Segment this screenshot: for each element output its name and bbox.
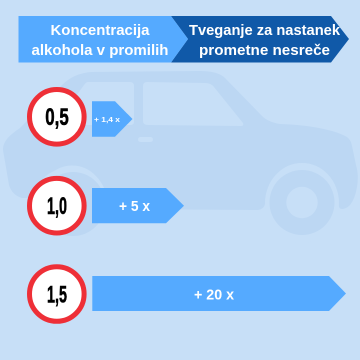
header arrow: alcohol concentration: alkohola v promilih <box>32 43 168 59</box>
bar +20 x: + 20 x <box>194 286 235 303</box>
sign 1,0: 1,0 <box>47 193 67 220</box>
door handle <box>138 137 153 142</box>
header arrow: risk of a traffic accident: Tveganje za nastanek <box>189 23 341 39</box>
front side window <box>143 82 243 126</box>
row 0,5 <box>30 90 132 144</box>
rear side window <box>58 82 134 125</box>
row 1,5 <box>30 267 346 321</box>
row 1,0 <box>30 178 184 233</box>
header arrow: alcohol concentration: Koncentracija <box>50 23 150 39</box>
bar +5 x: + 5 x <box>119 198 151 215</box>
rear wheel arch <box>40 167 107 204</box>
front wheel <box>270 170 334 235</box>
background car silhouette <box>3 71 358 243</box>
sign 0,5: 0,5 <box>45 104 69 131</box>
bar +1,4 x: + 1,4 x <box>94 115 121 124</box>
sign 1,5: 1,5 <box>47 282 67 308</box>
header arrow: risk of a traffic accident <box>171 16 349 62</box>
bar +5 x <box>92 188 184 223</box>
rear wheel <box>41 172 105 236</box>
header arrow: alcohol concentration <box>18 16 188 62</box>
sign 1,0 <box>30 178 84 233</box>
sign 1,5 <box>30 267 84 321</box>
bar +20 x <box>92 276 346 311</box>
front wheel arch <box>265 163 339 243</box>
header arrow: risk of a traffic accident: prometne nesreče <box>199 43 330 59</box>
